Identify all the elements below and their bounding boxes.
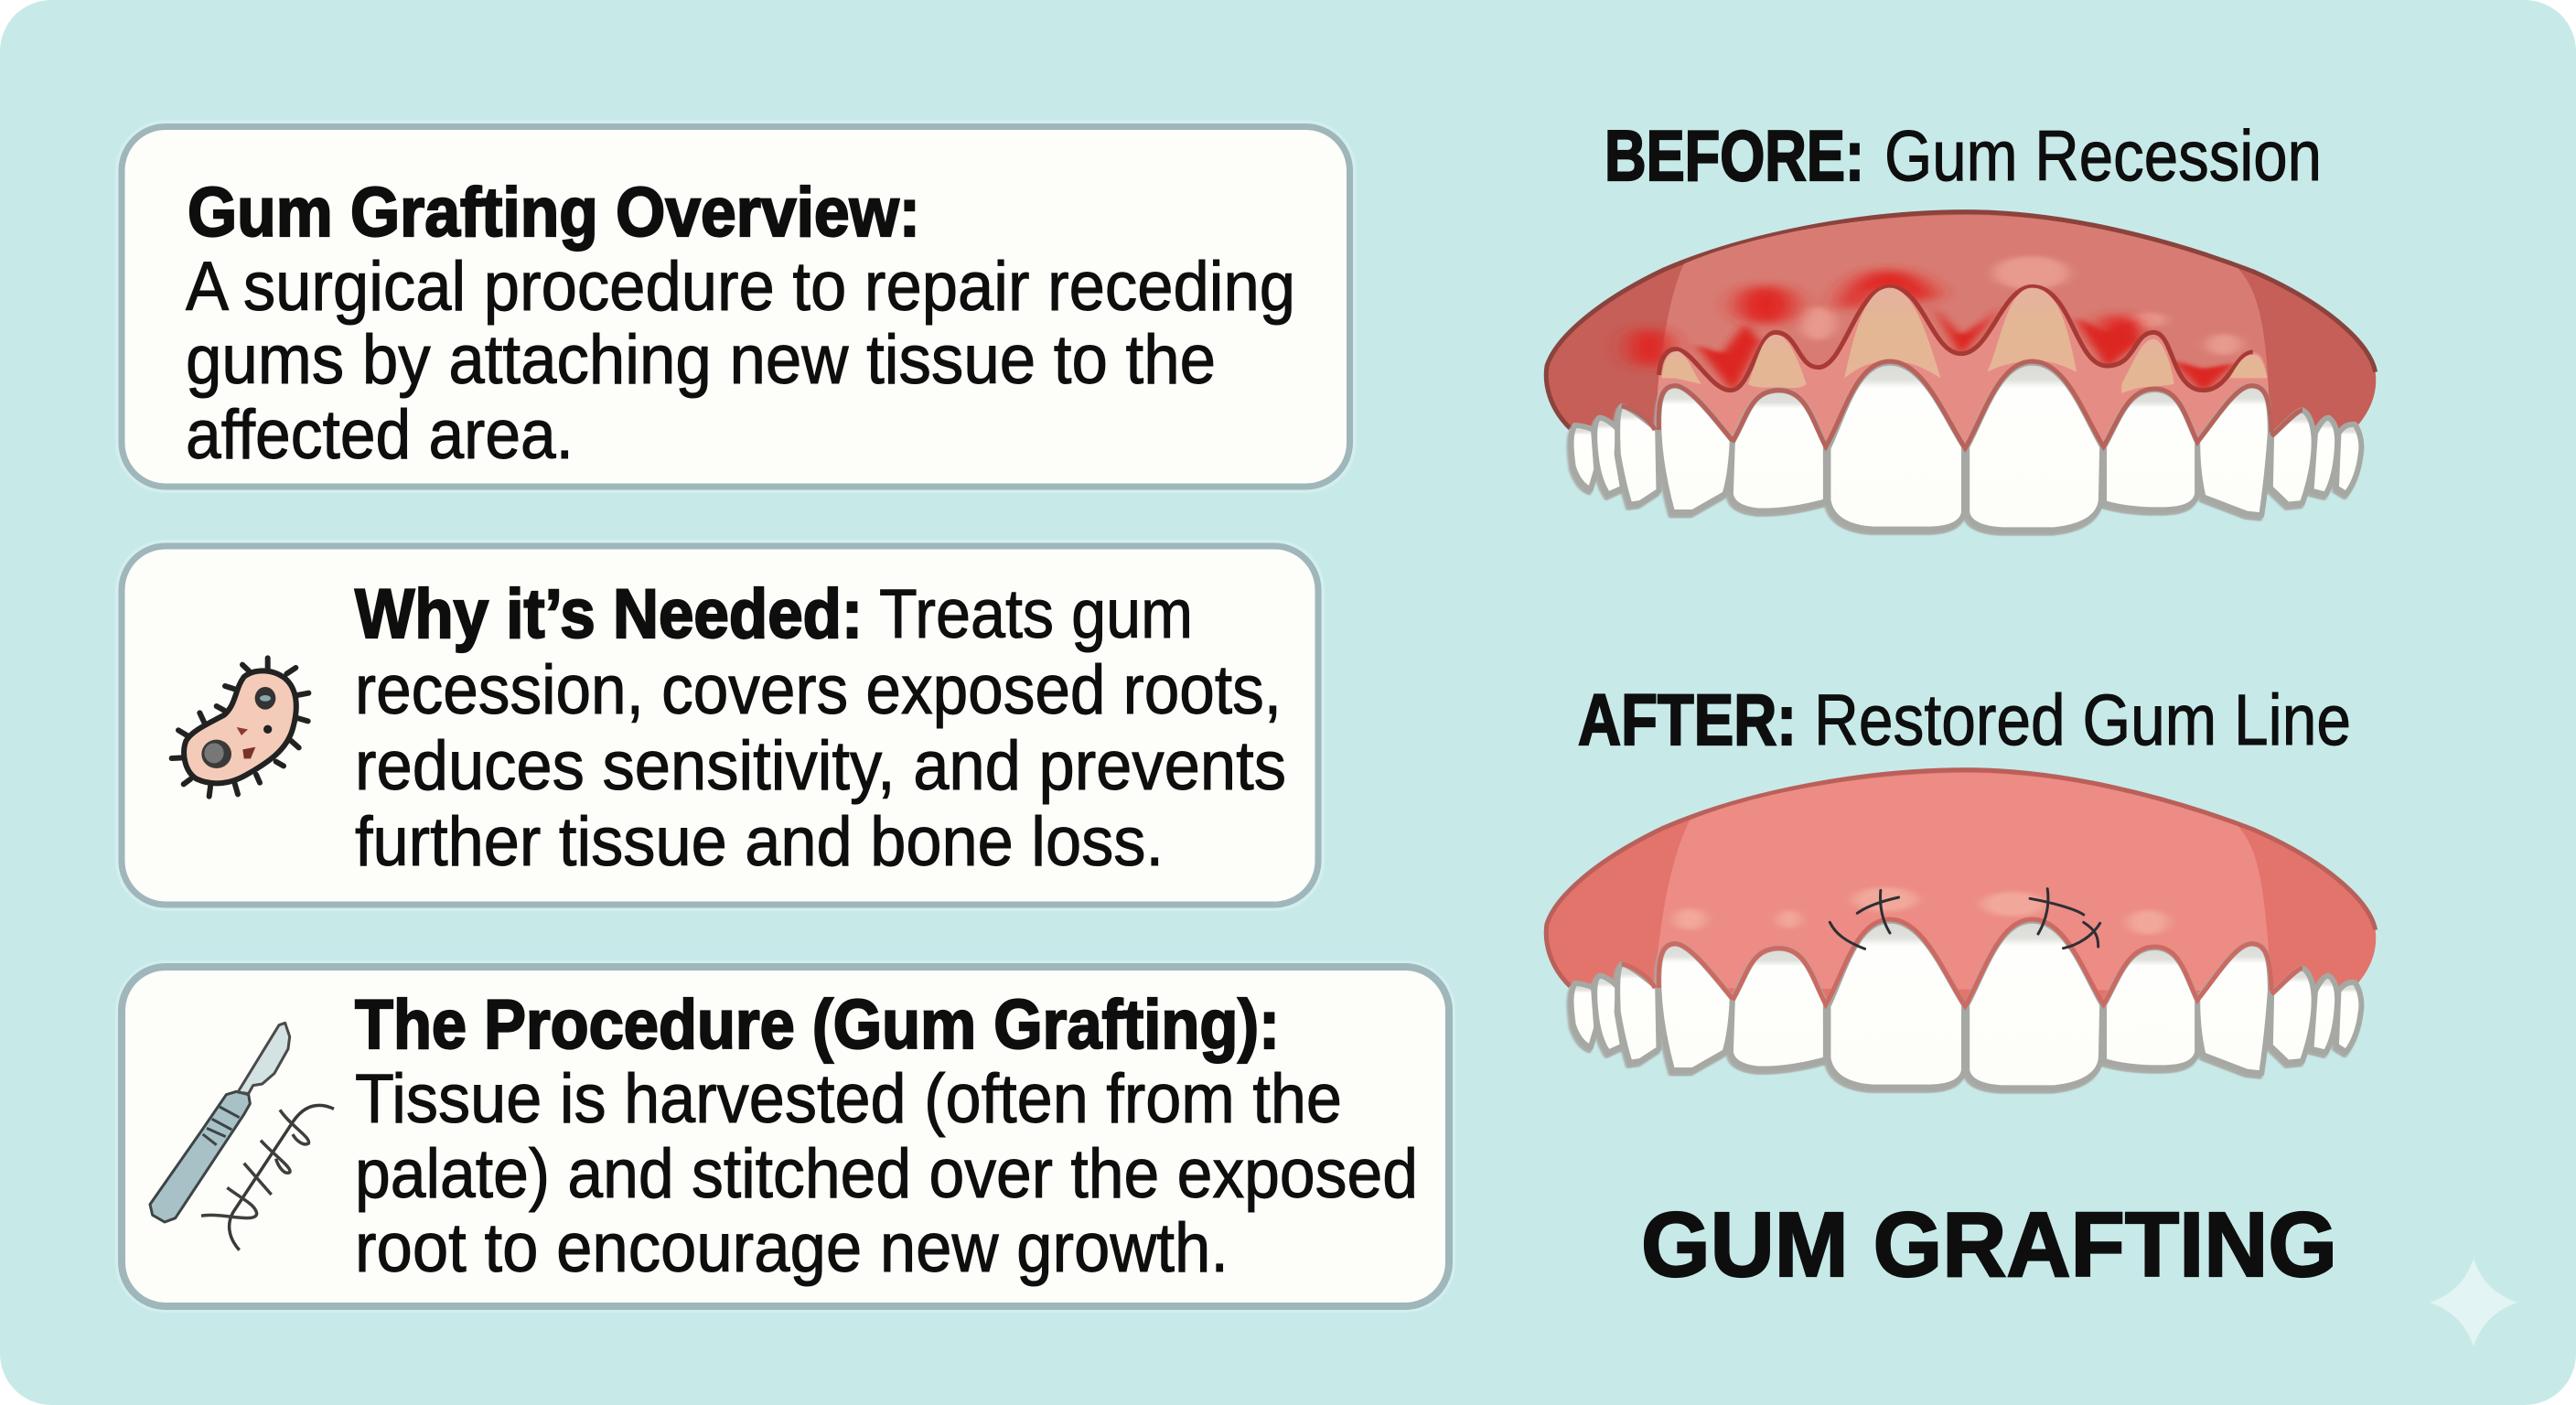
why it's needed text: further tissue and bone loss. [355, 803, 1164, 881]
heading: before [1605, 115, 2322, 196]
inflamed red patches [1628, 270, 2139, 368]
teeth [1572, 361, 2361, 530]
panel: the procedure [122, 967, 1449, 1306]
sutures [1830, 889, 2100, 949]
heading: before: Gum Recession [1884, 115, 2322, 196]
why it's needed text: reduces sensitivity, and prevents [355, 727, 1286, 805]
procedure text [355, 986, 1418, 1287]
why it's needed text: Why it’s Needed: [355, 575, 863, 653]
procedure text: root to encourage new growth. [355, 1209, 1229, 1287]
heading: after: AFTER: [1578, 679, 1797, 760]
heading: before: BEFORE: [1605, 115, 1864, 196]
overview text: gums by attaching new tissue to the [186, 321, 1216, 399]
overview text: Gum Grafting Overview: [188, 174, 920, 252]
procedure text: Tissue is harvested (often from the [355, 1060, 1342, 1138]
procedure text: palate) and stitched over the exposed [355, 1135, 1418, 1213]
panel: overview [122, 126, 1350, 487]
why it's needed text [355, 575, 1286, 881]
receded gum margin [1655, 286, 2271, 448]
healed tissue highlights [1673, 887, 2168, 935]
title: GUM GRAFTING [1641, 1194, 2337, 1296]
panel: why it's needed [122, 546, 1318, 905]
illustration: gum recession [1546, 212, 2376, 530]
why it's needed text: recession, covers exposed roots, [355, 651, 1282, 729]
overview text: affected area. [186, 396, 574, 474]
overview text [186, 174, 1295, 474]
illustration: restored gum line [1546, 770, 2376, 1088]
heading: after: Restored Gum Line [1814, 679, 2351, 760]
procedure text: The Procedure (Gum Grafting): [355, 986, 1280, 1064]
heading: after [1578, 679, 2351, 760]
teeth [1572, 919, 2361, 1088]
icon: scalpel and sutures [150, 1023, 334, 1250]
exposed roots [1662, 288, 2268, 393]
icon: bacterium [172, 658, 308, 797]
why it's needed text: Treats gum [879, 575, 1193, 653]
icon: sparkle [2430, 1259, 2517, 1346]
overview text: A surgical procedure to repair receding [186, 248, 1295, 326]
